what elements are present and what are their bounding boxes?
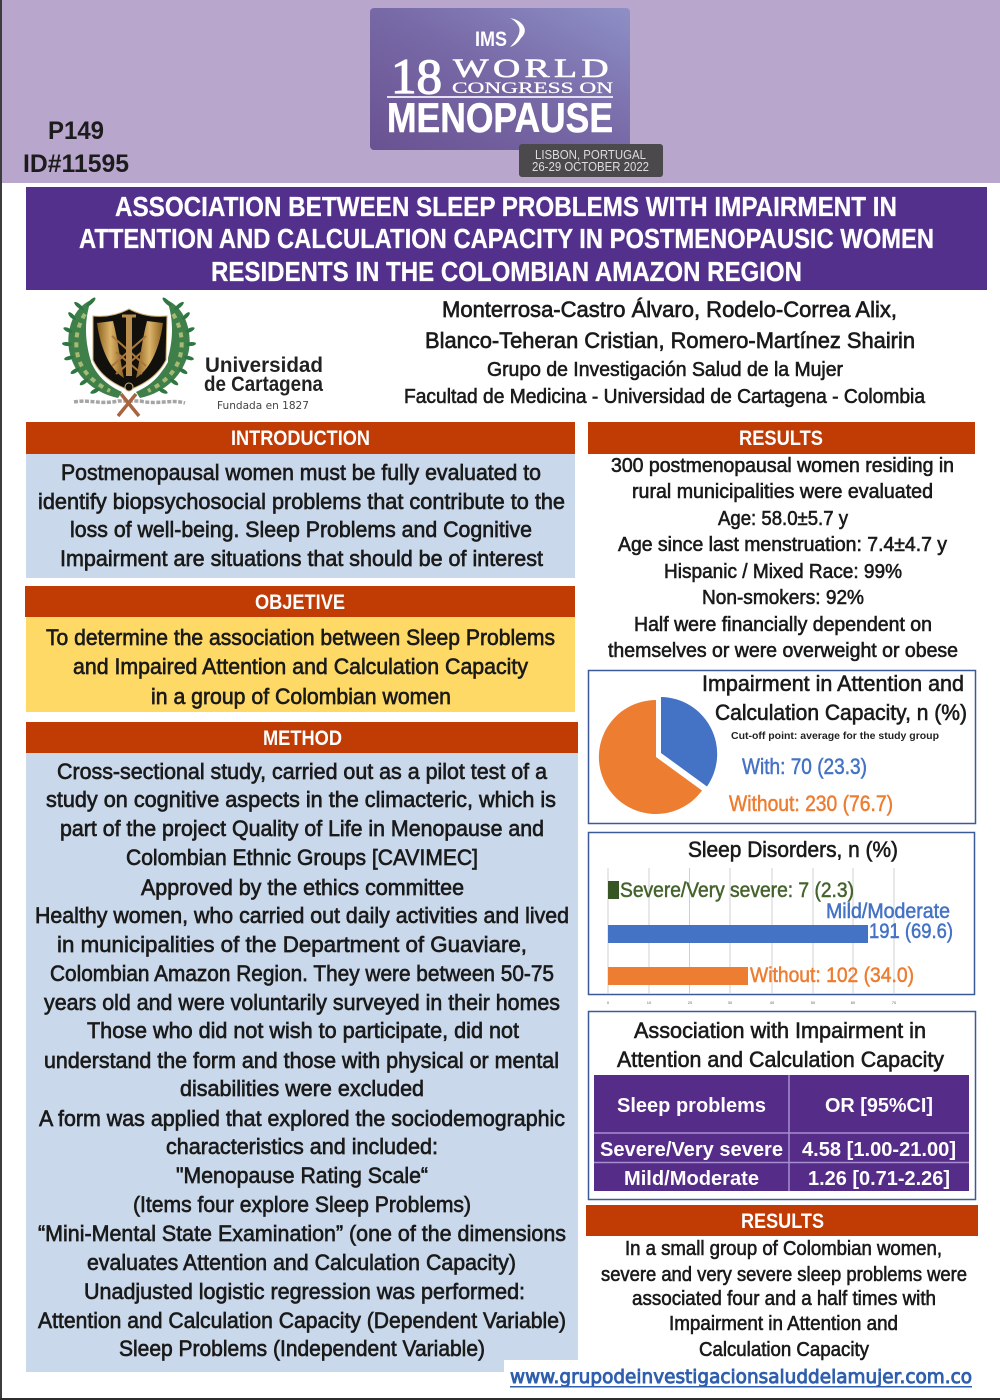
panel: objective: To determine the association between Sleep Problems <box>46 625 555 650</box>
axis tick labels: 50 <box>811 1000 816 1005</box>
panel: objective <box>25 586 575 712</box>
panel: objective: and Impaired Attention and Calculation Capacity <box>73 654 528 679</box>
panel: method: understand the form and those with physical or mental <box>44 1048 559 1073</box>
panel: results summary: themselves or were overweight or obese <box>608 640 958 662</box>
panel: conclusions: severe and very severe sleep problems were <box>601 1264 967 1286</box>
bar: without <box>608 967 748 985</box>
panel: impairment pie chart: With: 70 (23.3) <box>742 754 867 779</box>
panel: method: characteristics and included: <box>166 1134 438 1159</box>
odds ratio table: OR [95%CI] <box>825 1095 933 1117</box>
authors and affiliation <box>404 297 926 408</box>
axis tick labels: 20 <box>688 1000 693 1005</box>
panel: conclusions: Impairment in Attention and <box>669 1313 898 1335</box>
authors and affiliation: Grupo de Investigación Salud de la Mujer <box>487 359 843 381</box>
panel: impairment pie chart: Calculation Capacity, n (%) <box>715 700 967 725</box>
bar: mild <box>608 925 868 943</box>
university name: de Cartagena <box>204 373 323 396</box>
axis tick labels <box>607 1000 897 1005</box>
panel: conclusions <box>586 1205 978 1361</box>
panel: method: Attention and Calculation Capacity (Dependent Variable) <box>38 1308 566 1333</box>
panel: sleep disorders bar chart <box>588 832 974 1005</box>
heading: method: METHOD <box>263 727 342 750</box>
odds ratio table: Sleep problems <box>617 1095 766 1117</box>
heading: method <box>26 722 578 753</box>
heading: objective <box>25 586 575 617</box>
axis tick labels: 30 <box>728 1000 733 1005</box>
panel: method: years old and were voluntarily surveyed in their homes <box>44 990 560 1015</box>
axis tick labels: 60 <box>851 1000 856 1005</box>
axis tick labels: 70 <box>892 1000 897 1005</box>
panel: results summary: Half were financially dependent on <box>634 614 932 636</box>
label: mild: Mild/Moderate <box>826 900 950 923</box>
location badge <box>519 144 663 177</box>
congress logo: MENOPAUSE <box>387 94 613 141</box>
panel: method: Colombian Ethnic Groups [CAVIMEC] <box>126 845 478 870</box>
authors and affiliation: Blanco-Teheran Cristian, Romero-Martínez Shairin <box>425 328 915 353</box>
odds ratio table: 1.26 [0.71-2.26] <box>808 1168 950 1190</box>
panel: results summary: Age since last menstruation: 7.4±4.7 y <box>618 534 947 556</box>
icon: crest shield <box>91 307 169 393</box>
heading: results: RESULTS <box>739 427 823 450</box>
odds ratio table: Mild/Moderate <box>624 1168 759 1190</box>
axis tick labels: 10 <box>647 1000 652 1005</box>
panel: conclusions: Calculation Capacity <box>699 1339 869 1361</box>
panel: introduction <box>26 422 575 578</box>
heading: objective: OBJETIVE <box>255 591 345 614</box>
pie chart <box>599 697 717 814</box>
congress logo: CONGRESS ON <box>452 80 614 97</box>
panel: conclusions: In a small group of Colombian women, <box>625 1238 942 1260</box>
heading: results <box>586 1205 978 1236</box>
axis tick labels: 40 <box>770 1000 775 1005</box>
panel: results summary: Hispanic / Mixed Race: 99% <box>664 561 902 583</box>
title banner: RESIDENTS IN THE COLOMBIAN AMAZON REGION <box>211 256 802 287</box>
axis tick labels: 0 <box>607 1000 610 1005</box>
icon: crest wreath <box>62 296 196 416</box>
panel: impairment pie chart: Without: 230 (76.7) <box>729 791 893 816</box>
panel: method: Those who did not wish to participate, did not <box>87 1018 519 1043</box>
panel: sleep disorders bar chart: Sleep Disorders, n (%) <box>688 837 898 862</box>
panel: method: disabilities were excluded <box>180 1076 424 1101</box>
panel: method: Cross-sectional study, carried out as a pilot test of a <box>57 759 548 784</box>
location badge: 26-29 OCTOBER 2022 <box>532 160 649 174</box>
panel: method: Healthy women, who carried out daily activities and lived <box>35 903 569 928</box>
panel: results summary: 300 postmenopausal women residing in <box>611 455 954 477</box>
title banner: ASSOCIATION BETWEEN SLEEP PROBLEMS WITH IMPAIRMENT IN <box>115 191 897 222</box>
panel: impairment pie chart: Impairment in Attention and <box>702 671 964 696</box>
panel: results summary: rural municipalities were evaluated <box>632 481 933 503</box>
heading: results <box>588 422 975 454</box>
university name: Universidad <box>205 354 323 377</box>
authors and affiliation: Facultad de Medicina - Universidad de Cartagena - Colombia <box>404 386 926 408</box>
title banner <box>26 187 987 290</box>
poster number: P149 <box>48 117 104 145</box>
panel: results summary: Non-smokers: 92% <box>702 587 864 609</box>
panel: method: A form was applied that explored the sociodemographic <box>39 1106 565 1131</box>
poster id: ID#11595 <box>23 150 129 178</box>
panel: conclusions: associated four and a half times with <box>632 1288 936 1310</box>
panel: introduction: loss of well-being. Sleep Problems and Cognitive <box>70 517 532 542</box>
panel: association table: Attention and Calculation Capacity <box>617 1047 944 1072</box>
congress logo: IMS <box>475 28 507 51</box>
panel: results summary: Age: 58.0±5.7 y <box>718 508 848 530</box>
label: without: Without: 102 (34.0) <box>750 964 914 987</box>
location badge: LISBON, PORTUGAL <box>535 148 646 162</box>
panel: introduction: Impairment are situations that should be of interest <box>60 546 543 571</box>
odds ratio table: 4.58 [1.00-21.00] <box>802 1139 956 1161</box>
panel: method: Colombian Amazon Region. They were between 50-75 <box>50 961 554 986</box>
heading: introduction <box>26 422 575 454</box>
authors and affiliation: Monterrosa-Castro Álvaro, Rodelo-Correa Alix, <box>442 297 897 322</box>
panel: method: Approved by the ethics committee <box>141 875 464 900</box>
header band <box>2 0 1000 183</box>
panel: method: evaluates Attention and Calculation Capacity) <box>87 1250 516 1275</box>
panel: method: study on cognitive aspects in the climacteric, which is <box>46 787 556 812</box>
panel: method: part of the project Quality of Life in Menopause and <box>60 816 544 841</box>
odds ratio table: Severe/Very severe <box>600 1139 783 1161</box>
university logo <box>62 296 323 416</box>
panel: method: “Mini-Mental State Examination” (one of the dimensions <box>38 1221 566 1246</box>
panel: results summary <box>588 422 975 662</box>
university name <box>204 354 323 412</box>
panel: objective: in a group of Colombian women <box>151 684 451 709</box>
odds ratio table <box>594 1075 969 1191</box>
value: mild: 191 (69.6) <box>869 920 953 943</box>
panel: association table <box>588 1012 976 1200</box>
panel: method: Unadjusted logistic regression was performed: <box>84 1279 525 1304</box>
bar: severe <box>608 881 619 899</box>
heading: introduction: INTRODUCTION <box>231 427 370 450</box>
congress logo: 18 <box>391 48 442 104</box>
panel: impairment pie chart: Cut-off point: average for the study group <box>731 731 939 742</box>
panel: introduction: identify biopsychosocial problems that contribute to the <box>38 489 565 514</box>
heading: results: RESULTS <box>741 1210 824 1233</box>
panel: association table: Association with Impairment in <box>634 1018 926 1043</box>
congress logo: WORLD <box>453 54 613 83</box>
panel: method: (Items four explore Sleep Problems) <box>133 1192 471 1217</box>
panel: method: in municipalities of the Department of Guaviare, <box>57 932 527 957</box>
panel: method: "Menopause Rating Scale“ <box>176 1163 428 1188</box>
panel: method: Sleep Problems (Independent Variable) <box>119 1336 485 1361</box>
website link: www.grupodeinvestigacionsaluddelamujer.com.co <box>510 1366 972 1388</box>
panel: method <box>26 722 578 1372</box>
label: severe: Severe/Very severe: 7 (2.3) <box>620 879 854 902</box>
congress logo <box>370 8 630 150</box>
panel: introduction: Postmenopausal women must be fully evaluated to <box>61 460 541 485</box>
panel: impairment pie chart <box>588 670 976 824</box>
university name: Fundada en 1827 <box>217 399 309 412</box>
